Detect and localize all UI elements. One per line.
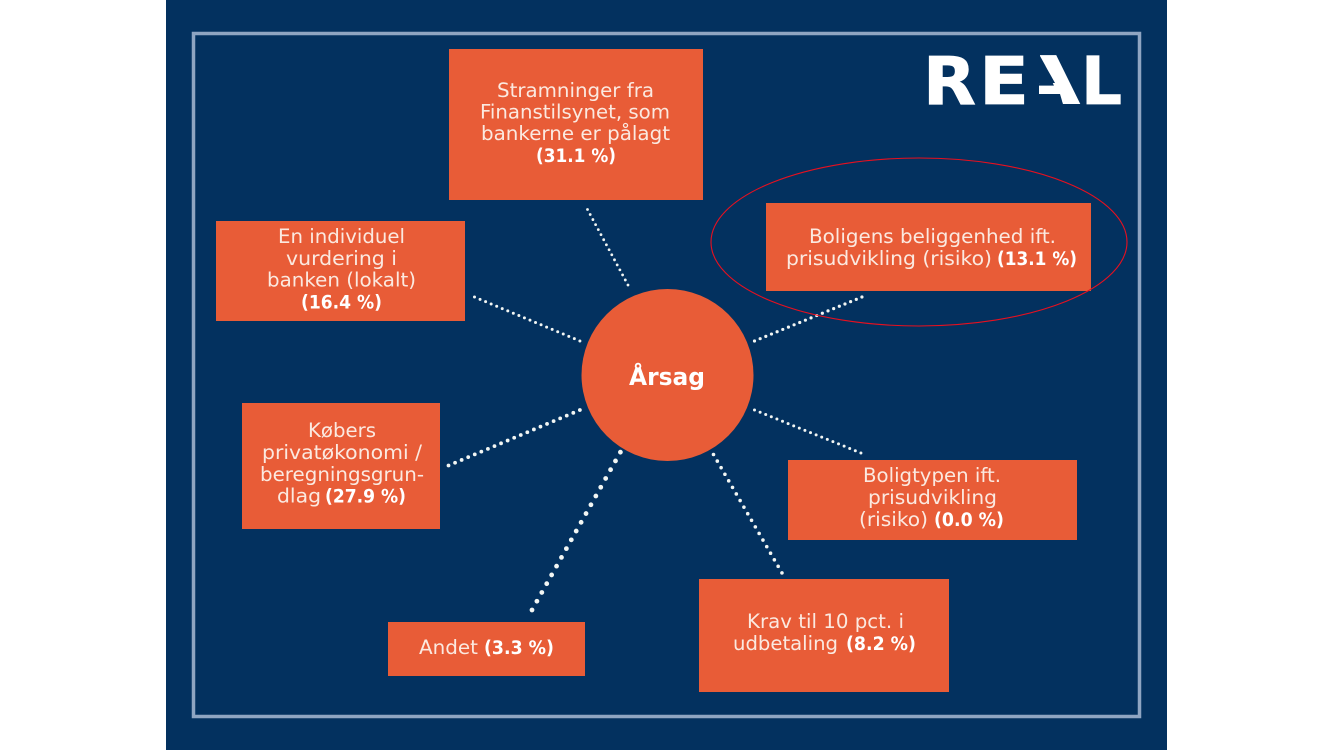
dotted connector: upper right [754, 297, 862, 341]
panel: Købers privatøkonomi: privatøkonomi / [262, 441, 422, 464]
panel: Stramninger: Stramninger fra [497, 79, 654, 102]
panel: Andet [388, 622, 585, 676]
dotted connector: lower right [754, 410, 861, 453]
panel: Købers privatøkonomi: dlag [277, 484, 321, 508]
panel: Købers privatøkonomi: beregningsgrun- [260, 463, 424, 486]
panel: En individuel vurdering: (16.4 %) [301, 292, 382, 314]
panel: Stramninger: (31.1 %) [536, 146, 616, 167]
logo: REAL [928, 55, 1121, 105]
panel: Boligens beliggenhed: prisudvikling (risiko) [786, 247, 992, 270]
logo: REAL: A [1012, 43, 1080, 120]
panel: En individuel vurdering [216, 221, 465, 321]
centre circle: Årsag [582, 289, 754, 461]
panel: En individuel vurdering: vurdering i [286, 247, 397, 270]
panel: Krav til udbetaling: udbetaling [733, 632, 838, 655]
panel: En individuel vurdering: En individuel [278, 225, 405, 248]
panel: Stramninger: Finanstilsynet, som [480, 100, 670, 124]
panel: Boligens beliggenhed: Boligens beliggenhed ift. [809, 225, 1056, 248]
centre circle: Årsag: Årsag [629, 362, 705, 391]
frame [194, 34, 1140, 716]
dotted connector: bottom left [532, 452, 620, 610]
panel: Købers privatøkonomi: (27.9 %) [325, 486, 406, 508]
panel: Stramninger [449, 49, 703, 200]
panel: Stramninger: bankerne er pålagt [481, 122, 670, 145]
navy background panel [166, 0, 1167, 750]
panel: Boligtypen: prisudvikling [868, 486, 997, 509]
panel: Boligtypen: (risiko) [859, 508, 928, 531]
panel: Boligtypen: (0.0 %) [934, 510, 1004, 531]
dotted connector: top [588, 210, 628, 285]
logo: REAL: R [923, 43, 976, 120]
panel: Boligtypen: Boligtypen ift. [863, 464, 1001, 487]
logo: REAL: L [1081, 43, 1122, 120]
panel: Købers privatøkonomi [242, 403, 440, 529]
panel: Boligens beliggenhed: (13.1 %) [997, 249, 1077, 270]
dotted connector: upper left [474, 297, 580, 341]
callout: red ellipse [711, 158, 1127, 326]
panel: Boligens beliggenhed [766, 203, 1091, 291]
panel: Krav til udbetaling [699, 579, 949, 692]
dotted connector: lower left [448, 410, 580, 466]
logo: REAL: E [979, 43, 1029, 120]
panel: Boligtypen [788, 460, 1077, 540]
panel: Andet: Andet [419, 636, 478, 659]
panel: Krav til udbetaling: Krav til 10 pct. i [747, 610, 904, 633]
dotted connector: bottom right [714, 454, 782, 573]
panel: Krav til udbetaling: (8.2 %) [846, 634, 916, 655]
panel: Andet: (3.3 %) [484, 638, 554, 659]
panel: Købers privatøkonomi: Købers [308, 419, 376, 442]
panel: En individuel vurdering: banken (lokalt) [267, 268, 416, 292]
